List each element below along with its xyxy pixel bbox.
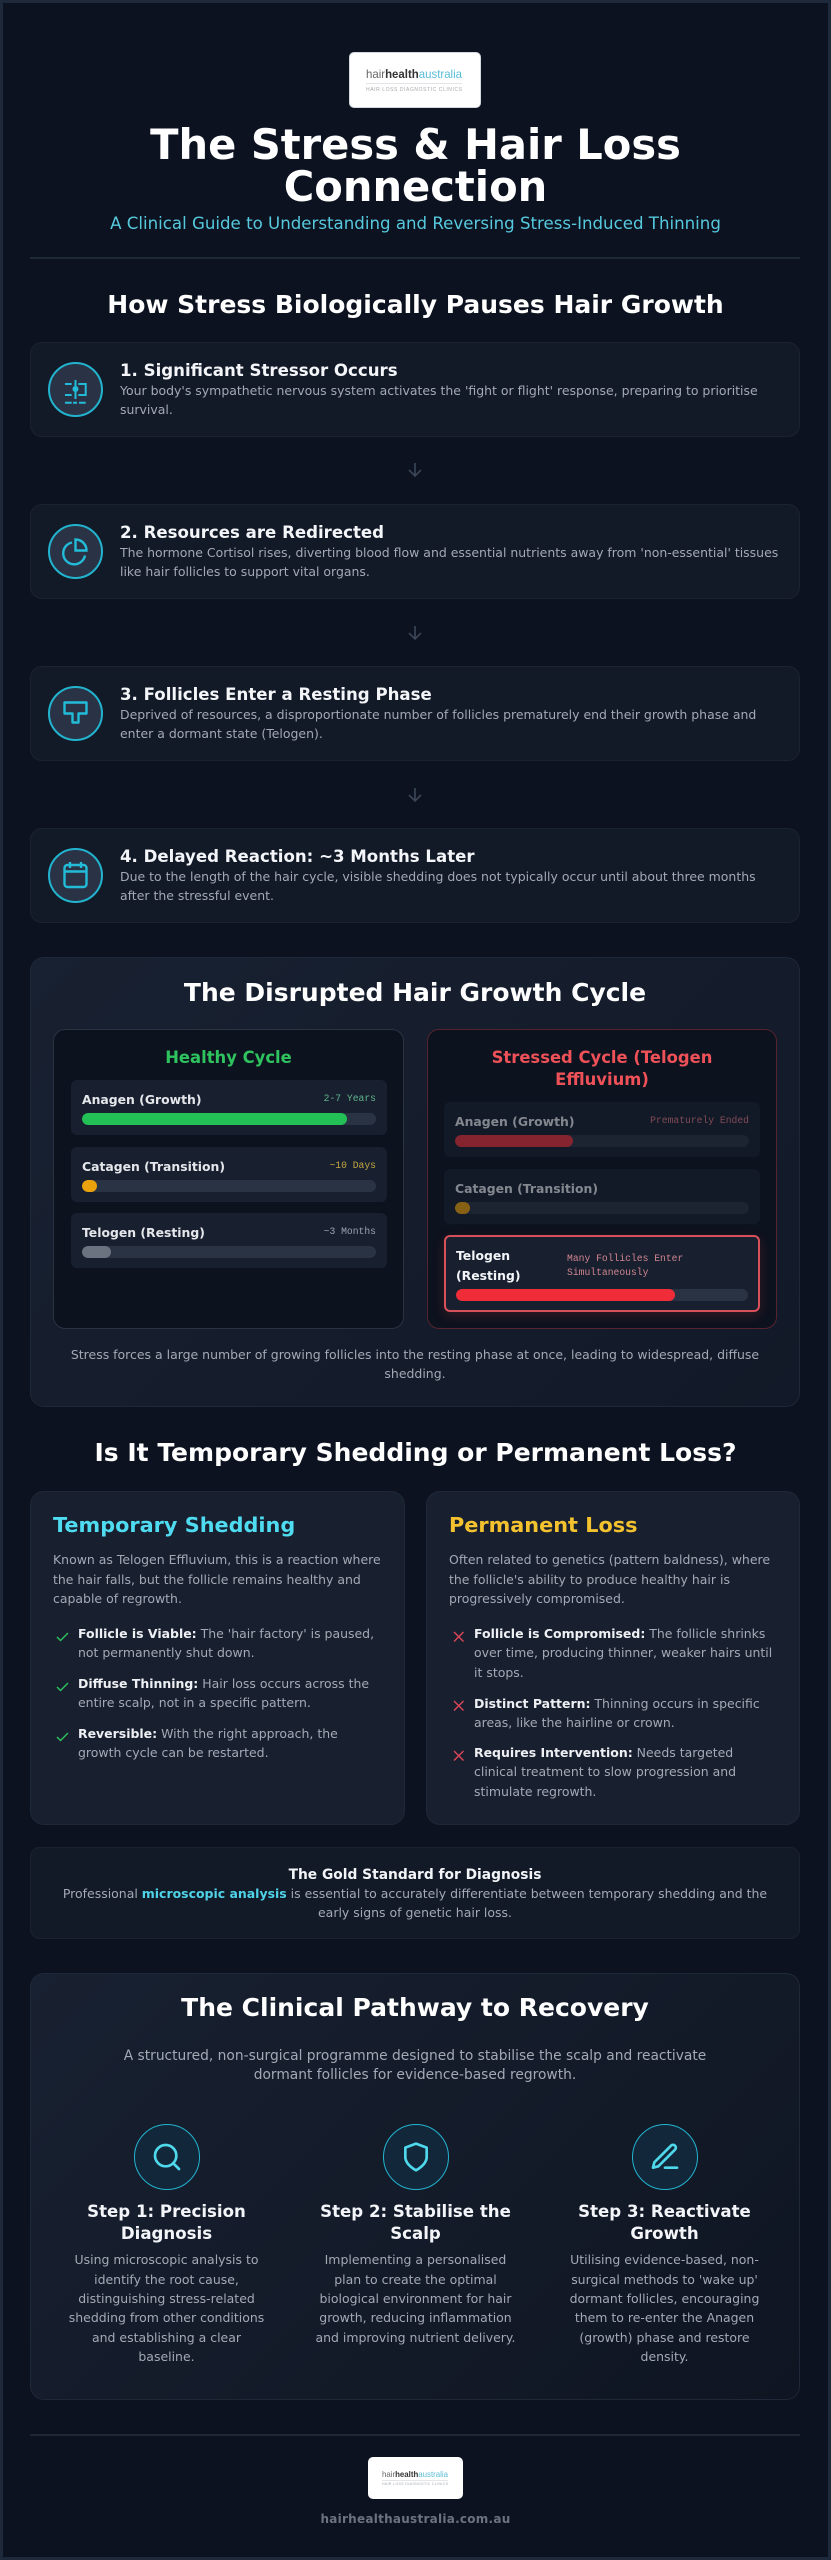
logo: header: HAIR LOSS DIAGNOSTIC CLINICS [366, 87, 463, 93]
stressed cycle title: Stressed Cycle (Telogen [492, 1048, 712, 1067]
step 1 title: 1. Significant Stressor Occurs [120, 360, 398, 380]
item: compromised [474, 1626, 772, 1680]
step 2 heading: Step 2: Stabilise the [320, 2202, 511, 2221]
permanent title: Permanent Loss [449, 1513, 638, 1537]
phase: anagen: 2-7 Years [324, 1093, 376, 1104]
title [150, 120, 681, 210]
step 2 text [120, 545, 778, 579]
logo: header [349, 52, 481, 108]
step 1 description: Using microscopic analysis to [75, 2252, 258, 2267]
item: follicle viable: not permanently shut down. [78, 1645, 255, 1660]
panel: step 1 stressor [30, 342, 800, 437]
logo: footer [368, 2457, 463, 2499]
arrow [408, 626, 422, 640]
phase: telogen highlighted: Simultaneously [567, 1267, 648, 1278]
step 4 title: 4. Delayed Reaction: ~3 Months Later [120, 846, 475, 866]
temporary intro: capable of regrowth. [53, 1591, 182, 1606]
footer url: hairhealthaustralia.com.au [320, 2512, 511, 2526]
step 1 text [120, 383, 758, 417]
step 2 text: The hormone Cortisol rises, diverting blood flow and essential nutrients away from 'non-essential' tissues [120, 545, 778, 560]
item: diffuse thinning: Diffuse Thinning: Hair loss occurs across the [78, 1676, 369, 1691]
step 1: precision diagnosis [69, 2124, 264, 2364]
phase: telogen [71, 1213, 387, 1268]
callout text [63, 1886, 767, 1920]
panel: step 4 delayed reaction [30, 828, 800, 923]
phase: catagen dimmed [444, 1169, 760, 1224]
phase: catagen dimmed: Catagen (Transition) [455, 1180, 598, 1196]
step 1 description [69, 2252, 264, 2364]
heading: disrupted cycle: The Disrupted Hair Growth Cycle [184, 978, 646, 1007]
step 1 description: baseline. [138, 2349, 195, 2364]
caption: shedding. [384, 1366, 446, 1381]
phase: telogen highlighted: Many Follicles Enter [567, 1253, 683, 1264]
step 2 heading: Scalp [390, 2224, 441, 2243]
icon: cross [454, 1700, 464, 1711]
permanent intro: the follicle's ability to produce healthy hair is [449, 1572, 730, 1587]
step 2 description: biological environment for hair [319, 2291, 512, 2306]
step 3 description [570, 2252, 759, 2364]
item: follicle viable: Follicle is Viable: The 'hair factory' is paused, [78, 1626, 374, 1641]
step 3 heading [578, 2202, 751, 2243]
phase: anagen: Anagen (Growth) [82, 1092, 202, 1106]
icon: pen [632, 2124, 698, 2190]
phase: catagen: ~10 Days [329, 1160, 376, 1171]
title: Connection [284, 162, 547, 210]
step 3 description: dormant follicles, encouraging [570, 2291, 759, 2306]
panel: step 3 resting phase [30, 666, 800, 761]
step 1 heading: Diagnosis [121, 2224, 212, 2243]
phase: catagen [71, 1147, 387, 1202]
phase: telogen: Telogen (Resting) [82, 1224, 205, 1240]
icon: shield [382, 2124, 448, 2190]
step 1 heading [87, 2202, 246, 2243]
pathway intro: dormant follicles for evidence-based regrowth. [254, 2067, 576, 2083]
step 2 description: and improving nutrient delivery. [315, 2330, 516, 2345]
temporary title: Temporary Shedding [53, 1513, 295, 1537]
item: diffuse thinning: entire scalp, not in a specific pattern. [78, 1695, 311, 1710]
permanent intro: Often related to genetics (pattern baldness), where [449, 1552, 770, 1567]
icon: cross [454, 1632, 464, 1642]
panel: disrupted hair growth cycle [30, 957, 800, 1407]
step 2 title: 2. Resources are Redirected [120, 522, 384, 542]
item: follicle viable [78, 1626, 374, 1660]
logo: footer: HAIR LOSS DIAGNOSTIC CLINICS [382, 2482, 449, 2486]
step 3 description: (growth) phase and restore [579, 2330, 750, 2345]
item: diffuse thinning [78, 1676, 369, 1710]
callout text: Professional microscopic analysis is essential to accurately differentiate between temporary shedding and the [63, 1886, 767, 1901]
arrow [408, 463, 422, 477]
pathway intro: A structured, non-surgical programme designed to stabilise the scalp and reactivate [124, 2048, 706, 2064]
item: reversible: Reversible: With the right approach, the [78, 1726, 338, 1741]
panel: step 2 redirected [30, 504, 800, 599]
icon: check [56, 1732, 68, 1742]
step 2 description [315, 2252, 516, 2345]
temporary intro [53, 1552, 381, 1606]
item: requires intervention: Requires Intervention: Needs targeted [474, 1745, 733, 1760]
step 3 description: surgical methods to 'wake up' [571, 2272, 758, 2287]
item: distinct pattern [474, 1696, 760, 1730]
step 2 heading [320, 2202, 511, 2243]
step 2 description: plan to create the optimal [334, 2272, 497, 2287]
step 4 text: after the stressful event. [120, 888, 274, 903]
item: reversible: growth cycle can be restarted. [78, 1745, 269, 1760]
permanent intro: progressively compromised. [449, 1591, 625, 1606]
step 2 text: like hair follicles to support vital organs. [120, 564, 370, 579]
step 3 text: Deprived of resources, a disproportionate number of follicles prematurely end their growth phase and [120, 707, 756, 722]
step 4 text: Due to the length of the hair cycle, visible shedding does not typically occur until about three months [120, 869, 756, 884]
item: compromised: it stops. [474, 1665, 524, 1680]
step 3 description: density. [641, 2349, 688, 2364]
heading: how stress pauses hair growth: How Stress Biologically Pauses Hair Growth [107, 290, 724, 319]
step 1 heading: Step 1: Precision [87, 2202, 246, 2221]
phase: anagen [71, 1080, 387, 1135]
icon: magnifier [134, 2124, 200, 2190]
item: requires intervention: clinical treatment to slow progression and [474, 1764, 736, 1779]
stressed cycle title: Effluvium) [555, 1070, 649, 1089]
icon: check [56, 1632, 68, 1642]
caption [71, 1347, 759, 1381]
phase: anagen dimmed: Anagen (Growth) [455, 1114, 574, 1128]
callout: gold standard [30, 1847, 800, 1939]
step 3 heading: Step 3: Reactivate [578, 2202, 751, 2221]
phase: telogen highlighted [444, 1235, 760, 1312]
temporary intro: the hair falls, but the follicle remains healthy and [53, 1572, 361, 1587]
logo: header: hairhealthaustralia [366, 67, 462, 81]
step 1 text: Your body's sympathetic nervous system activates the 'fight or flight' response, preparing to prioritise [120, 383, 758, 398]
temporary intro: Known as Telogen Effluvium, this is a reaction where [53, 1552, 381, 1567]
step 4 text [120, 869, 756, 903]
phase: anagen dimmed [444, 1102, 760, 1157]
phase: catagen: Catagen (Transition) [82, 1158, 225, 1174]
logo: footer: hairhealthaustralia [382, 2469, 448, 2479]
panel: stressed cycle [427, 1029, 777, 1329]
icon: check [56, 1682, 68, 1692]
step 1 description: and establishing a clear [92, 2330, 241, 2345]
item: distinct pattern: Distinct Pattern: Thinning occurs in specific [474, 1696, 760, 1710]
subtitle: A Clinical Guide to Understanding and Reversing Stress-Induced Thinning [110, 214, 721, 233]
phase: telogen highlighted: Telogen [456, 1248, 510, 1263]
item: requires intervention: stimulate regrowth. [474, 1784, 596, 1799]
icon: pie chart [48, 524, 103, 579]
step 3 title: 3. Follicles Enter a Resting Phase [120, 684, 432, 704]
panel: clinical pathway [30, 1973, 800, 2400]
phase: telogen: ~3 Months [324, 1226, 376, 1237]
step 3: reactivate growth [570, 2124, 759, 2364]
arrow [408, 788, 422, 802]
heading: clinical pathway: The Clinical Pathway to Recovery [181, 1993, 649, 2022]
step 3 heading: Growth [630, 2224, 699, 2243]
stressed cycle title [492, 1048, 712, 1089]
title: The Stress & Hair Loss [150, 120, 681, 168]
callout text: early signs of genetic hair loss. [318, 1905, 512, 1920]
step 1 description: distinguishing stress-related [78, 2291, 255, 2306]
item: requires intervention [474, 1745, 736, 1799]
panel: permanent loss [426, 1491, 800, 1825]
step 1 description: shedding from other conditions [69, 2310, 264, 2325]
phase: telogen highlighted: (Resting) [456, 1268, 521, 1282]
permanent intro [449, 1552, 770, 1606]
icon: stress sliders [48, 362, 103, 417]
item: reversible [78, 1726, 338, 1760]
icon: calendar [48, 848, 103, 903]
phase: anagen dimmed: Prematurely Ended [650, 1115, 749, 1126]
step 2 description: Implementing a personalised [325, 2252, 506, 2267]
heading: temporary or permanent: Is It Temporary Shedding or Permanent Loss? [94, 1438, 736, 1467]
healthy cycle title: Healthy Cycle [165, 1048, 292, 1067]
item: distinct pattern: areas, like the hairline or crown. [474, 1715, 675, 1730]
panel: temporary shedding [30, 1491, 405, 1825]
step 2: stabilise scalp [315, 2124, 516, 2345]
step 3 text [120, 707, 756, 741]
step 3 description: them to re-enter the Anagen [575, 2310, 754, 2325]
icon: cross [454, 1750, 464, 1761]
item: compromised: over time, producing thinner, weaker hairs until [474, 1645, 772, 1660]
step 1 text: survival. [120, 402, 173, 417]
step 1 description: identify the root cause, [94, 2272, 239, 2287]
panel: healthy cycle [53, 1029, 404, 1329]
item: compromised: Follicle is Compromised: The follicle shrinks [474, 1626, 765, 1641]
icon: t-shape follicle [48, 686, 103, 741]
step 3 description: Utilising evidence-based, non- [570, 2252, 759, 2267]
callout title: The Gold Standard for Diagnosis [289, 1866, 541, 1882]
caption: Stress forces a large number of growing follicles into the resting phase at once, leading to widespread, diffuse [71, 1347, 759, 1362]
step 2 description: growth, reducing inflammation [319, 2310, 512, 2325]
pathway intro [124, 2048, 706, 2083]
step 3 text: enter a dormant state (Telogen). [120, 726, 323, 741]
